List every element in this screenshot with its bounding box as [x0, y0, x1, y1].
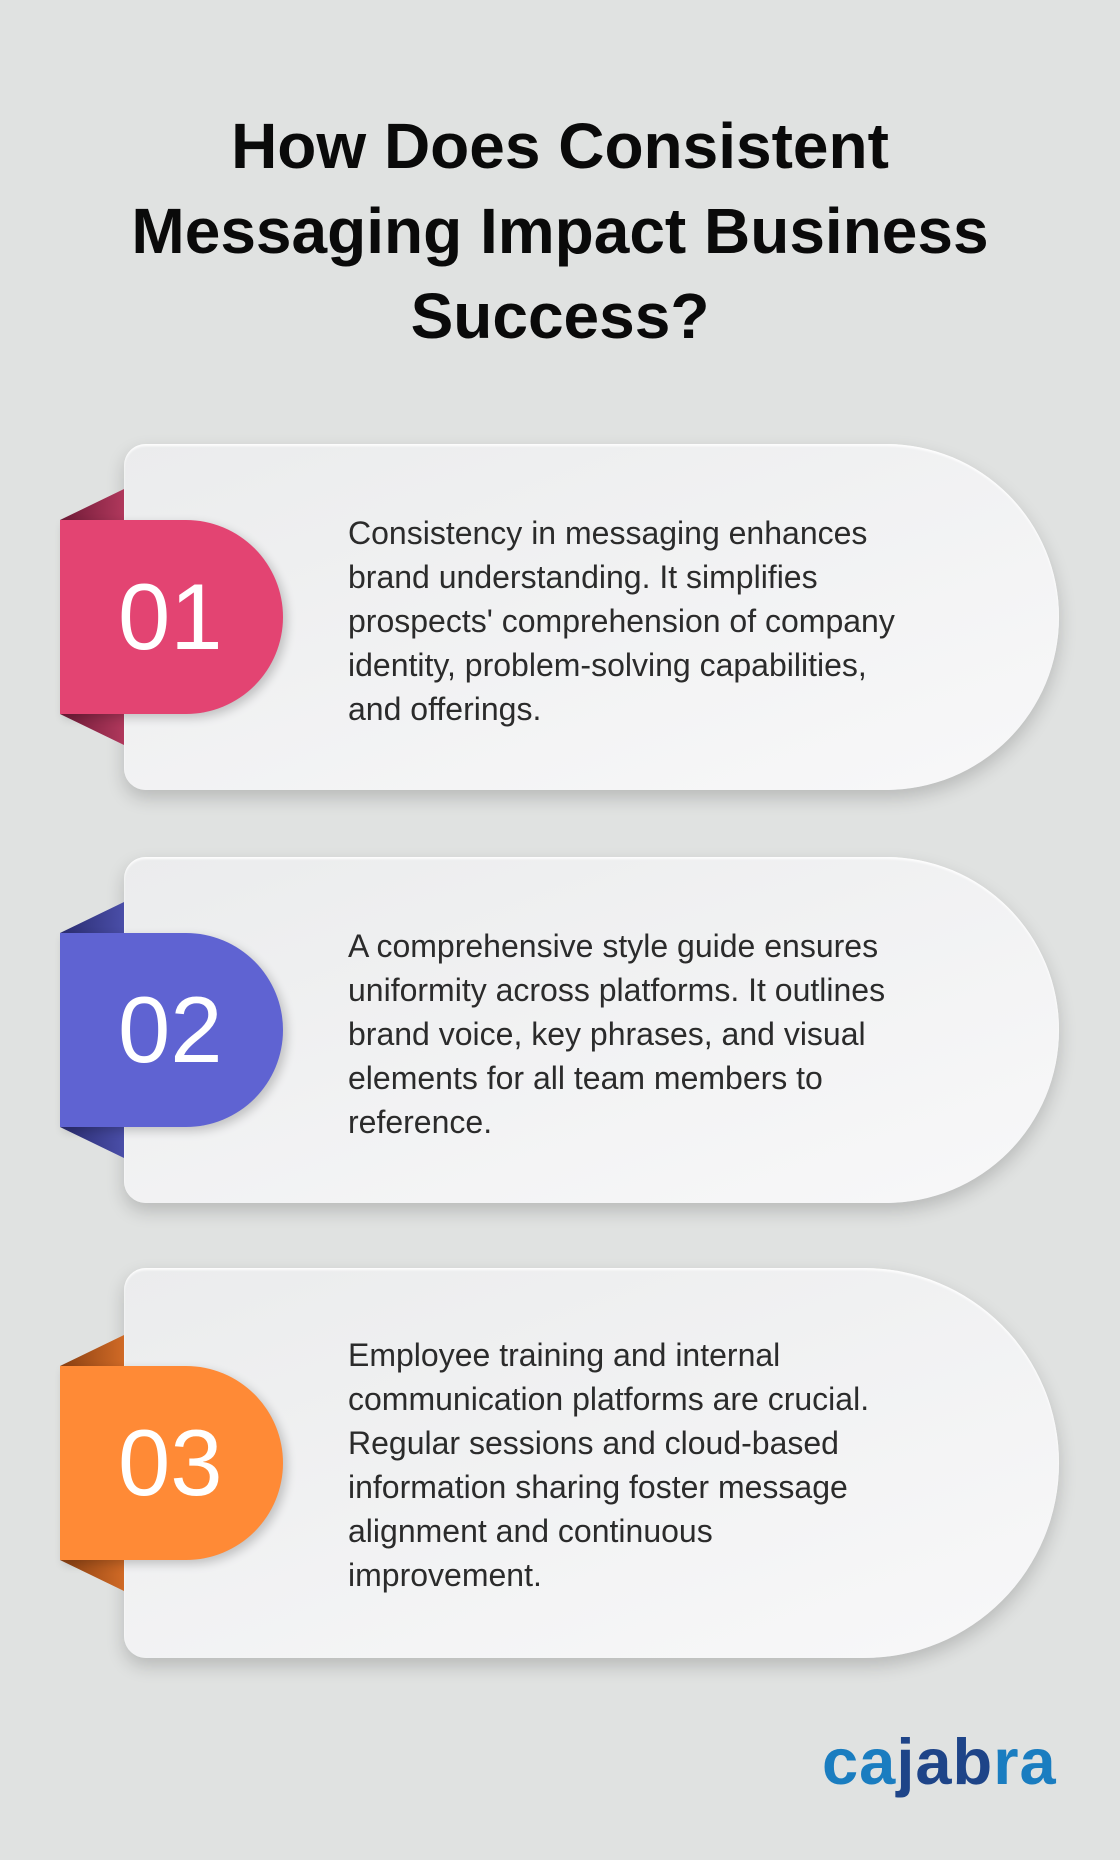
text 3: Employee training and internal [348, 1337, 780, 1373]
text 3: communication platforms are crucial. [348, 1381, 869, 1417]
title: Messaging Impact Business [131, 195, 989, 267]
text 3: Regular sessions and cloud-based [348, 1425, 839, 1461]
text 2: A comprehensive style guide ensures [348, 928, 878, 964]
logo: cajabra: cajabra [822, 1725, 1057, 1798]
text 3: information sharing foster message [348, 1469, 848, 1505]
panel: item 1 [60, 444, 1066, 805]
fold top 3 [60, 1335, 124, 1366]
fold top 2 [60, 902, 124, 933]
text 2 [348, 928, 885, 1140]
text 3 [348, 1337, 869, 1593]
text 3: improvement. [348, 1557, 542, 1593]
text 2: brand voice, key phrases, and visual [348, 1016, 866, 1052]
title: How Does Consistent [231, 110, 889, 182]
number tab 01 [60, 520, 283, 714]
title: Success? [411, 280, 709, 352]
text 2: reference. [348, 1104, 492, 1140]
fold bottom 3 [60, 1560, 124, 1591]
number tab 02: 02 [118, 977, 223, 1082]
panel: item 3 [60, 1268, 1066, 1673]
card 2 [124, 857, 1059, 1203]
text 1: and offerings. [348, 691, 541, 727]
fold bottom 2 [60, 1127, 124, 1158]
fold top 1 [60, 489, 124, 520]
text 2: uniformity across platforms. It outlines [348, 972, 885, 1008]
number tab 03 [60, 1366, 283, 1560]
card 1 [124, 444, 1059, 790]
text 1: identity, problem-solving capabilities, [348, 647, 867, 683]
title [131, 110, 989, 352]
text 3: alignment and continuous [348, 1513, 713, 1549]
text 1: Consistency in messaging enhances [348, 515, 867, 551]
fold bottom 1 [60, 714, 124, 745]
text 1 [348, 515, 895, 727]
number tab 02 [60, 933, 283, 1127]
number tab 01: 01 [118, 564, 223, 669]
panel: item 2 [60, 857, 1066, 1218]
card 3 [124, 1268, 1059, 1658]
text 1: brand understanding. It simplifies [348, 559, 818, 595]
text 1: prospects' comprehension of company [348, 603, 895, 639]
number tab 03: 03 [118, 1410, 223, 1515]
text 2: elements for all team members to [348, 1060, 823, 1096]
